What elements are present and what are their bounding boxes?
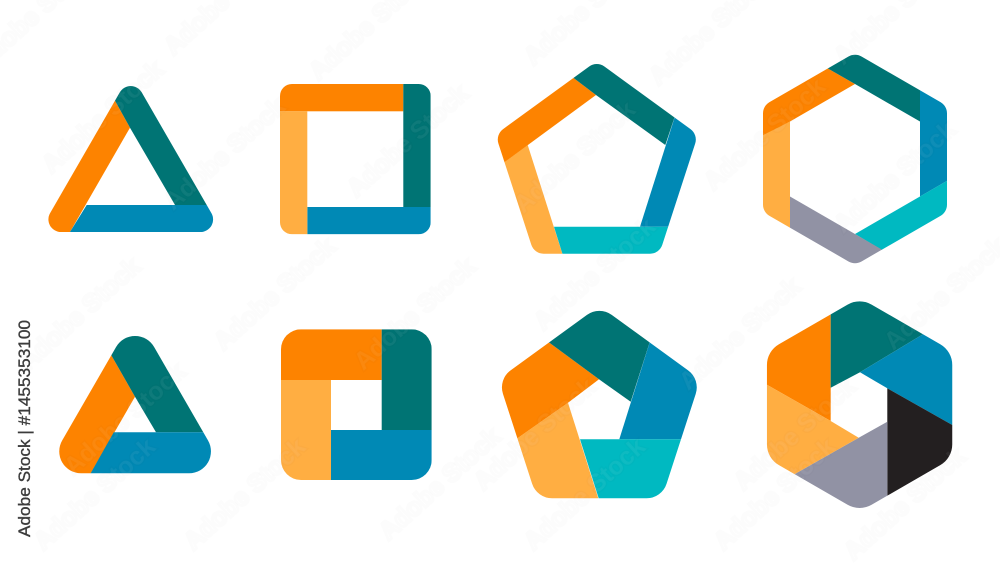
segment: orange [48,100,130,232]
segment: orange [281,329,382,380]
icon: thin segmented square [280,84,431,234]
text: Adobe Stock [674,272,806,396]
segment: blue [70,205,214,232]
segment: teal [574,64,674,145]
credit: vertical stock id text: Adobe Stock | #1455353100 [15,320,34,537]
icon: thin segmented triangle [48,86,214,232]
icon: thick segmented triangle [59,336,211,474]
segment: teal [828,54,920,122]
segment: orange [498,78,596,162]
segment: light orange [281,380,331,480]
text: Adobe Stock [29,432,161,556]
segment: light orange [763,122,790,228]
segment: light orange [280,111,307,234]
segment: teal [115,86,207,205]
text: Adobe Stock [729,372,861,496]
segment: orange [766,314,831,421]
text: Adobe Stock [59,357,191,481]
segment: teal [403,84,431,207]
segment: teal [549,310,650,402]
segment: teal [382,329,432,430]
text: Adobe Stock [349,252,481,376]
icon: thin segmented hexagon [763,54,947,264]
segment: grey [790,196,882,264]
segment: blue [920,90,947,196]
text: Adobe Stock [179,432,311,556]
text: Adobe Stock [839,442,971,563]
text: Adobe Stock [529,212,661,336]
text: Adobe Stock [209,232,341,356]
text: Adobe Stock [159,92,291,216]
segment: orange [502,342,599,438]
segment: blue [307,207,431,234]
segment: blue [860,327,965,432]
segment: blue [619,342,697,440]
text: Adobe Stock [829,115,961,239]
segment: cyan [855,181,947,250]
segment: dark [887,388,965,520]
text: Adobe Stock [709,432,841,556]
segment: blue [90,432,211,474]
segment: teal [111,336,204,432]
text: Adobe Stock [342,79,474,203]
text: Adobe Stock [37,55,169,179]
segment: cyan [580,439,681,498]
icon: thick segmented hexagon [766,301,952,508]
icon: thick segmented square [281,329,432,480]
segment: orange [763,68,855,136]
segment: orange [59,355,135,474]
segment: light orange [504,145,562,254]
icon: thin segmented pentagon [498,64,696,254]
segment: blue [640,118,696,227]
segment: light orange [755,378,859,482]
segment: cyan [554,226,668,254]
text: Adobe Stock [519,432,651,556]
text: Adobe Stock [374,422,506,546]
segment: light orange [517,403,598,498]
text: Adobe Stock [14,252,146,376]
text: Adobe Stock [469,372,601,496]
segment: blue [331,430,432,480]
segment: orange [280,84,403,111]
segment: grey [780,422,887,520]
text: Adobe Stock [509,95,641,219]
icon: thick segmented pentagon [502,310,697,498]
segment: teal [830,301,923,388]
text: Adobe Stock [699,72,831,196]
